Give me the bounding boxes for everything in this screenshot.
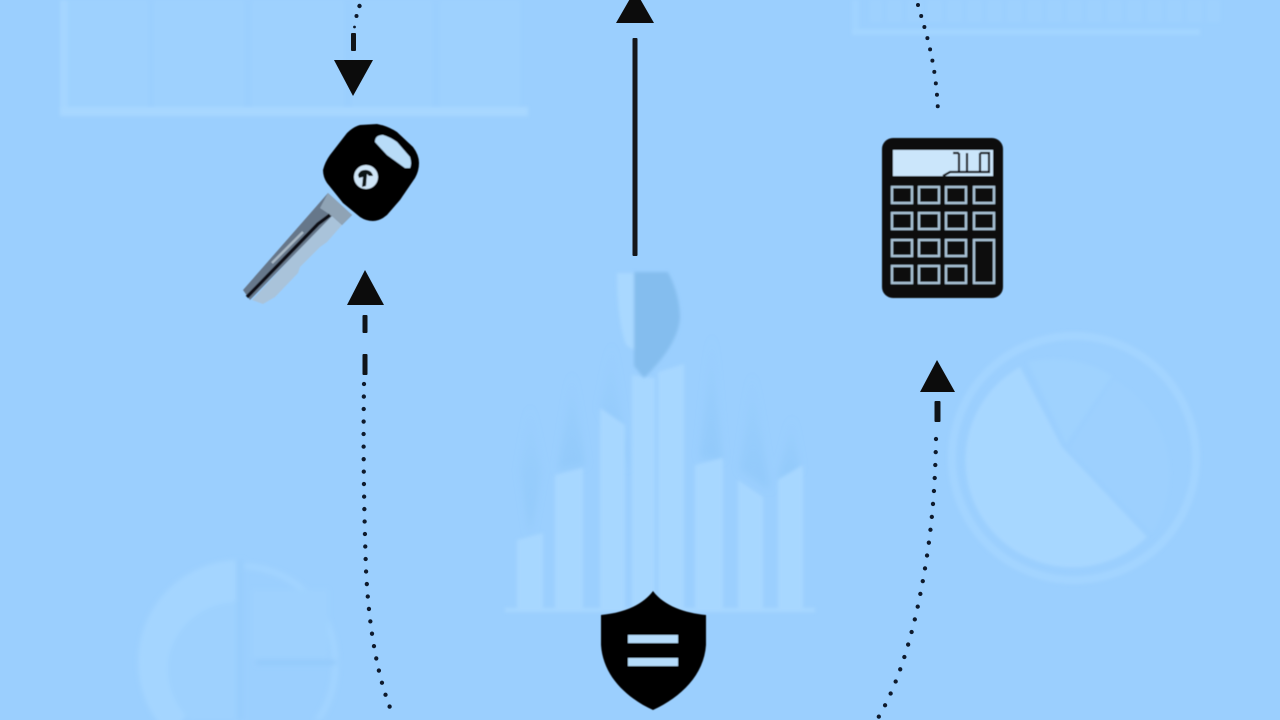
arrow: up to key <box>347 270 393 715</box>
key blade shoulder <box>320 193 352 225</box>
pie slice: large light <box>965 367 1147 567</box>
arrow: up to calculator <box>878 360 955 718</box>
key head <box>323 124 419 221</box>
key slot <box>375 135 411 168</box>
key blade highlight <box>272 232 303 263</box>
arrow: down to key <box>334 4 373 96</box>
chart bars <box>505 364 815 612</box>
pie slice: upper faint <box>1028 359 1112 444</box>
key blade groove <box>247 215 330 297</box>
ghost bar chart: top left <box>60 0 528 116</box>
key blade body <box>243 193 352 300</box>
arrow: centre up <box>616 0 654 256</box>
calculator keys <box>892 187 994 283</box>
pie slice: right faint <box>1070 380 1169 532</box>
icon: calculator <box>882 138 1003 298</box>
chart spikes <box>520 330 800 535</box>
ghost donut chart: bottom left <box>138 560 338 720</box>
ghost bar chart: centre <box>505 330 815 612</box>
icon: car key <box>243 124 419 304</box>
key lock badge <box>354 165 378 189</box>
ghost shield <box>617 272 680 378</box>
icon: shield <box>601 591 706 710</box>
calculator display <box>893 150 993 176</box>
ghost bar chart: top right <box>852 0 1220 35</box>
key blade lower light edge <box>252 214 342 304</box>
arrow: top right dots to calculator <box>918 5 938 112</box>
ghost pie chart: right <box>952 336 1196 580</box>
